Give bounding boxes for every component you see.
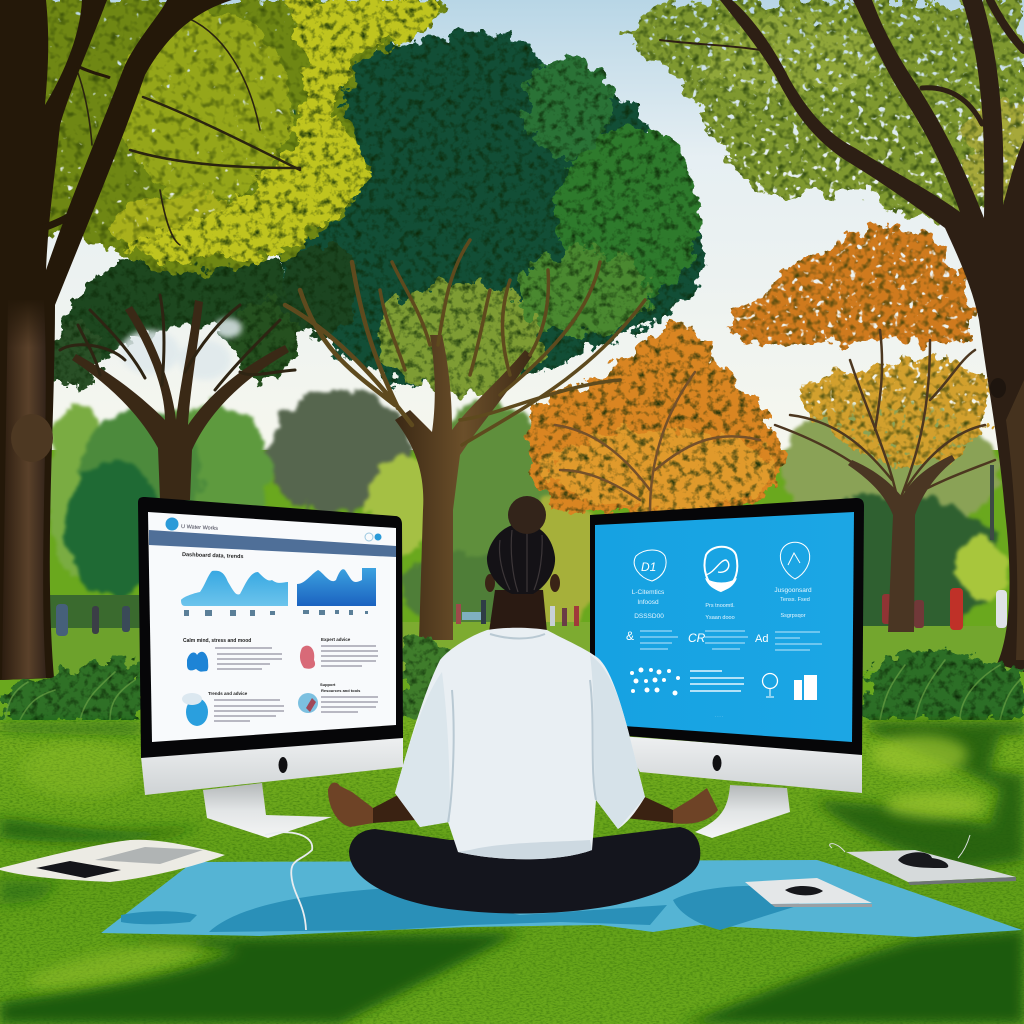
neck bbox=[489, 590, 547, 632]
labels column 2: Ysaan dooo bbox=[705, 615, 735, 621]
header bar bbox=[149, 530, 396, 557]
top left yellow canopy bbox=[0, 0, 440, 273]
back left tree bbox=[50, 240, 300, 500]
right midground trunk bbox=[848, 455, 955, 632]
left tablet bbox=[0, 840, 225, 882]
labels column 3: Jusgoonsard bbox=[774, 587, 812, 594]
labels column 1: Infoosd bbox=[637, 599, 659, 606]
icon: balloon bbox=[762, 674, 778, 697]
labels column 2: Prs tnoomtl. bbox=[705, 603, 735, 609]
list lines bbox=[690, 671, 744, 691]
lamp post bbox=[990, 465, 994, 540]
yoga mat bbox=[101, 860, 1022, 937]
labels column 3: Tenss. Fsed bbox=[780, 597, 810, 603]
braids bbox=[499, 528, 542, 592]
icon: loop badge bbox=[705, 547, 737, 591]
trousers bbox=[349, 827, 700, 914]
stand bbox=[203, 783, 332, 838]
right hand bbox=[673, 788, 718, 824]
panel: card 3 bbox=[182, 691, 284, 726]
apple logo bbox=[278, 757, 288, 773]
grass bbox=[0, 720, 1024, 1024]
labels column 1: DSSSD00 bbox=[634, 613, 664, 620]
labels column 2 bbox=[705, 603, 735, 621]
panel: area chart A: Dashboard data, trends bbox=[182, 552, 244, 560]
distant people bbox=[56, 588, 1007, 636]
chin bbox=[620, 736, 862, 793]
icon: scattered dots bbox=[630, 668, 680, 696]
orange autumn trees bbox=[523, 228, 995, 516]
front right tablet bbox=[745, 878, 872, 907]
panel: card 4 bbox=[298, 682, 378, 713]
centre tree bbox=[276, 28, 712, 640]
shirt bbox=[395, 628, 645, 859]
panel: card 1: Calm mind, stress and mood bbox=[183, 638, 251, 644]
text rows: Ad bbox=[755, 633, 768, 645]
shirt folds bbox=[395, 634, 645, 859]
panel: card 4: Support bbox=[320, 682, 336, 687]
labels column 3: Ssgrpsqor bbox=[780, 613, 806, 619]
head bbox=[487, 523, 555, 594]
screen bbox=[148, 512, 396, 742]
background trees bbox=[40, 390, 1008, 635]
icon: bars bbox=[794, 675, 817, 700]
panel: area chart A bbox=[181, 552, 288, 616]
left foreground trunk bbox=[0, 0, 232, 680]
icon: D1 badge: D1 bbox=[641, 560, 656, 574]
panel: area chart B bbox=[297, 568, 376, 615]
panel: card 2: Expert advice bbox=[321, 637, 351, 642]
left hand bbox=[328, 783, 373, 827]
right monitor bbox=[590, 498, 864, 838]
bezel bbox=[590, 498, 864, 755]
text rows: & bbox=[626, 629, 634, 643]
labels column 1 bbox=[632, 589, 665, 620]
screen bbox=[595, 512, 854, 742]
logo and name bbox=[166, 518, 382, 541]
bezel bbox=[138, 497, 403, 758]
left arm bbox=[373, 795, 415, 823]
panel: card 1 bbox=[183, 638, 282, 672]
person meditating bbox=[328, 496, 718, 914]
right foreground trunk bbox=[660, 0, 1024, 672]
top right tree foliage bbox=[625, 0, 1024, 220]
apple logo bbox=[712, 755, 722, 771]
sky bbox=[0, 0, 1024, 450]
chin bbox=[141, 737, 403, 795]
hair bun bbox=[508, 496, 546, 534]
panel: card 3: Trends and advice bbox=[208, 691, 248, 696]
text rows bbox=[626, 629, 822, 650]
icon: D1 badge bbox=[634, 550, 666, 581]
logo and name: U Water Works bbox=[181, 524, 218, 532]
left monitor bbox=[138, 497, 403, 838]
far right tablet bbox=[830, 835, 1016, 885]
panel: card 2 bbox=[300, 637, 378, 669]
shrubs bbox=[0, 636, 1024, 722]
footer text: . . . . bbox=[715, 713, 723, 718]
ears bbox=[485, 574, 560, 592]
labels column 1: L-Citemtics bbox=[632, 589, 665, 596]
labels column 3 bbox=[774, 587, 812, 619]
stand bbox=[695, 785, 790, 838]
icon: pin badge bbox=[780, 542, 810, 579]
lawn in distance bbox=[50, 622, 1010, 678]
right arm bbox=[625, 797, 673, 823]
panel: card 4: Resources and tools bbox=[321, 688, 361, 693]
text rows: CR bbox=[688, 631, 706, 645]
sunlit patches bbox=[20, 735, 985, 997]
cable bbox=[265, 832, 312, 930]
shadow overlays bbox=[0, 722, 1024, 1024]
